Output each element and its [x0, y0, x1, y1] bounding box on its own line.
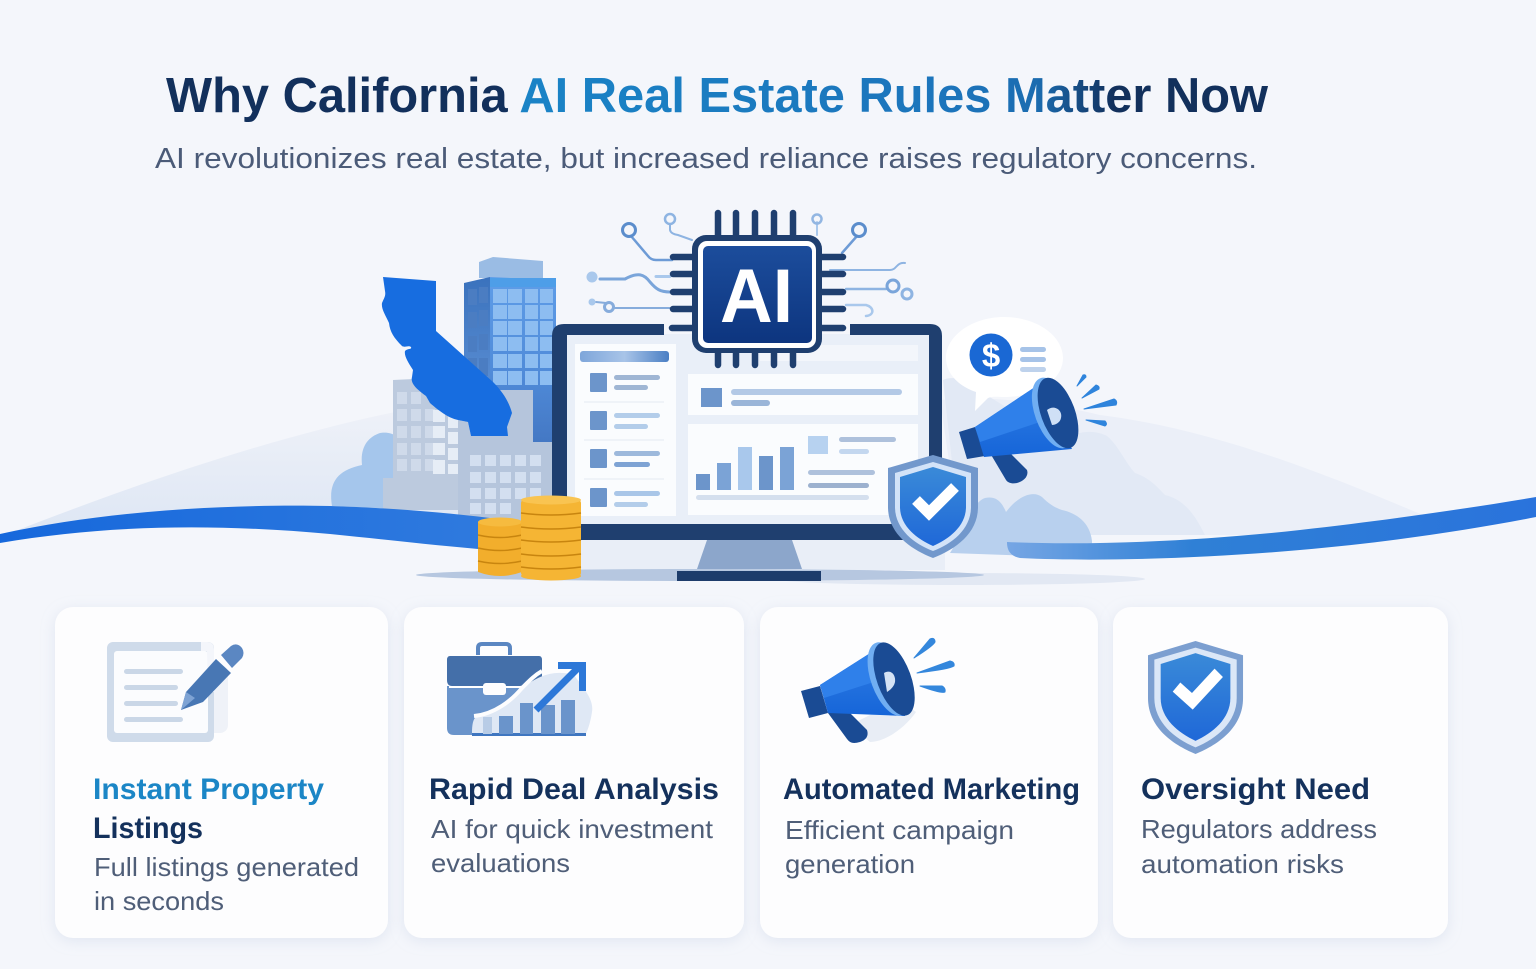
- description: [94, 852, 359, 916]
- description: Efficient campaign: [785, 815, 1014, 845]
- tower windows: [493, 289, 553, 385]
- heading: Rapid Deal Analysis: [429, 773, 719, 806]
- monitor stand: [697, 540, 802, 569]
- icon: megaphone: [801, 637, 954, 743]
- description: [431, 814, 714, 878]
- blue wave left: [0, 506, 490, 550]
- hero shield: [888, 455, 978, 558]
- monitor frame: [552, 324, 942, 540]
- top strip: [760, 345, 918, 361]
- description: [1141, 814, 1377, 879]
- info panel: [688, 374, 918, 415]
- icon: document and pencil: [107, 642, 244, 742]
- description: Full listings generated: [94, 852, 359, 882]
- description: [785, 815, 1014, 879]
- California map: [382, 277, 512, 436]
- list panel: [575, 344, 676, 516]
- background hills: [0, 378, 1425, 537]
- hero megaphone: [959, 372, 1117, 483]
- heading: Listings: [93, 812, 203, 845]
- blue tower: [464, 257, 556, 442]
- title: Why California AI Real Estate Rules Matter Now: [166, 69, 1269, 123]
- chip pins: [672, 213, 843, 365]
- speech bubble: [946, 317, 1063, 411]
- hero illustration: [0, 213, 1536, 585]
- heading: Oversight Need: [1141, 773, 1370, 806]
- description: in seconds: [94, 886, 224, 916]
- icon: briefcase and chart: [447, 644, 592, 736]
- heading: [93, 773, 324, 845]
- description: AI for quick investment: [431, 814, 714, 844]
- heading: Instant Property: [93, 773, 324, 806]
- hero megaphone rays: [1077, 375, 1117, 426]
- description: generation: [785, 849, 915, 879]
- monitor: [552, 324, 942, 581]
- blue wave right: [1007, 497, 1536, 560]
- monitor screen: [566, 334, 930, 526]
- megaphone rays: [914, 638, 954, 692]
- clouds left: [331, 433, 420, 510]
- under-monitor light area: [575, 540, 945, 570]
- monitor base: [677, 571, 821, 581]
- circuit traces: [586, 214, 912, 316]
- AI chip: [672, 213, 843, 365]
- subtitle: AI revolutionizes real estate, but increased reliance raises regulatory concerns.: [155, 143, 1257, 175]
- right coin stack: [521, 496, 581, 580]
- icon: shield: [1148, 641, 1243, 754]
- card: oversight need: [1113, 607, 1448, 938]
- description: automation risks: [1141, 849, 1344, 879]
- dollar icon: [970, 334, 1012, 376]
- grey buildings: [383, 378, 552, 525]
- description: Regulators address: [1141, 814, 1377, 844]
- gold coins: [478, 496, 581, 580]
- AI label: AI: [720, 254, 793, 339]
- card: rapid deal analysis: [404, 607, 744, 938]
- speech bubble: $: [982, 337, 1000, 374]
- card: automated marketing: [760, 607, 1098, 938]
- bar chart panel: [688, 424, 918, 515]
- description: evaluations: [431, 848, 570, 878]
- ground shadows: [416, 569, 1145, 585]
- heading: Automated Marketing: [783, 773, 1080, 806]
- left coin stack: [478, 518, 522, 576]
- clouds right: [950, 494, 1092, 558]
- card: instant property listings: [55, 607, 388, 938]
